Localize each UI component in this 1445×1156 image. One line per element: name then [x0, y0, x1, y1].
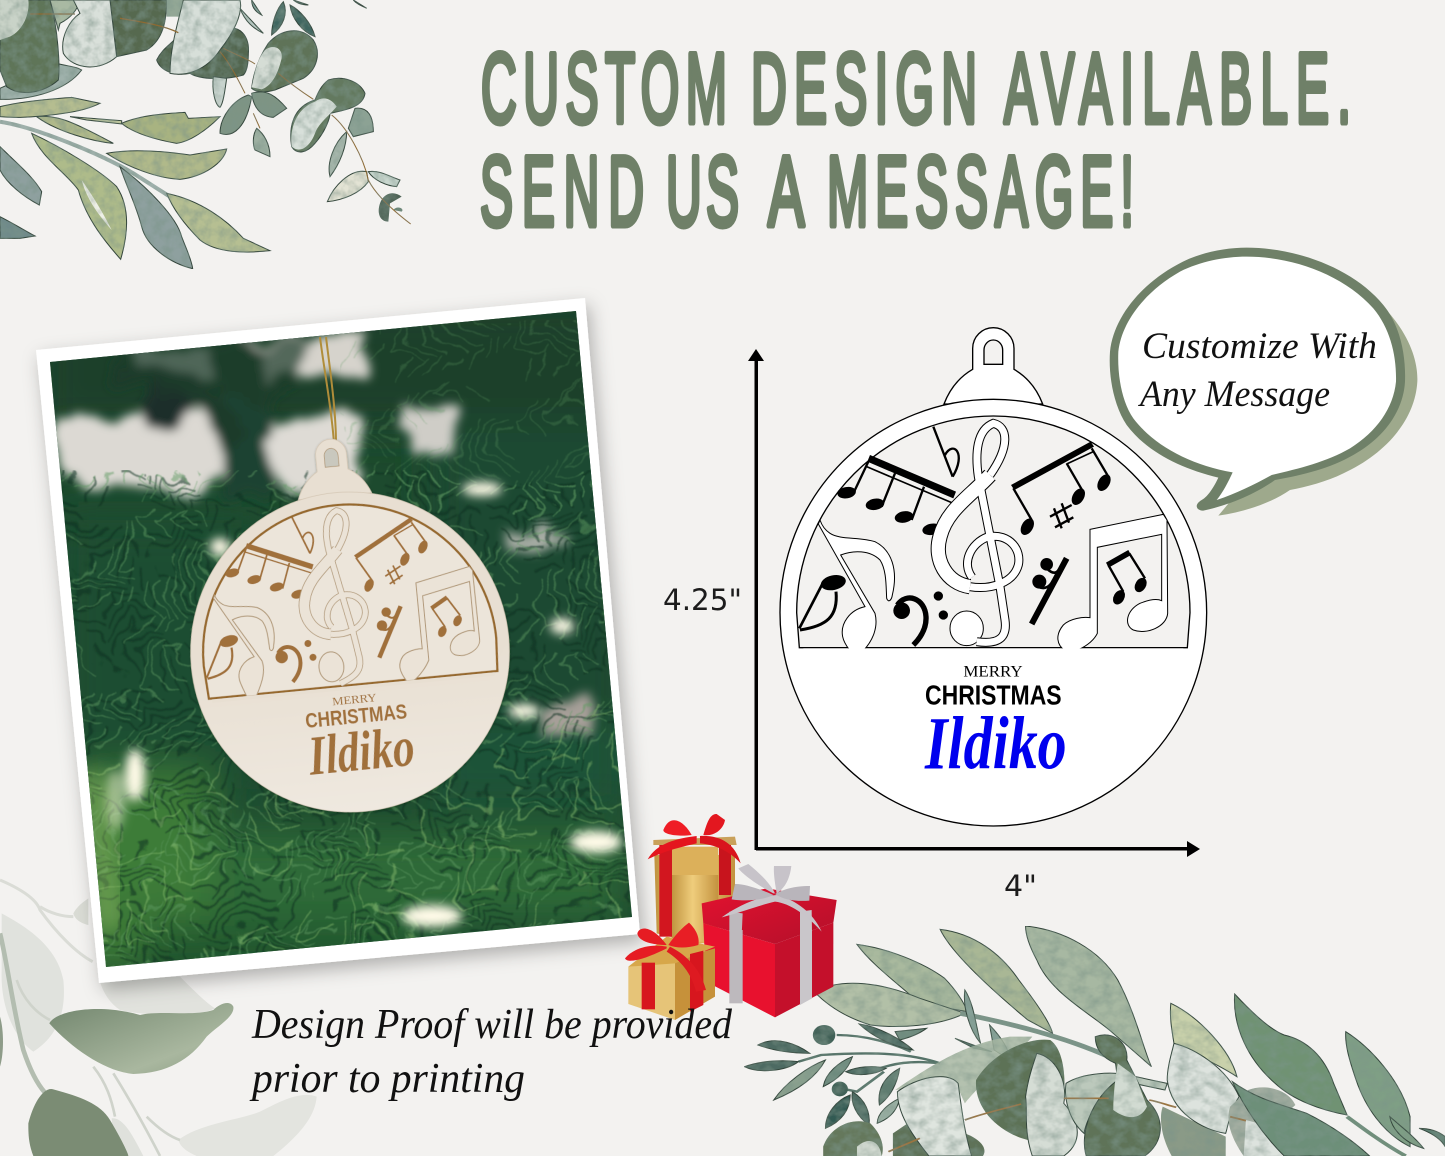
icon: gift boxes — [625, 814, 837, 1020]
photo panel: ornament on Christmas tree — [0, 290, 680, 1000]
wooden ornament — [171, 424, 524, 827]
leaves: bottom right eucalyptus garland — [744, 926, 1445, 1156]
proof note text — [249, 1002, 733, 1102]
leaves: top left eucalyptus — [0, 0, 411, 269]
hanging string — [320, 337, 336, 444]
wooden ornament: MERRY — [332, 692, 377, 709]
tree photograph — [50, 311, 632, 967]
wooden ornament: Ildiko — [305, 716, 417, 788]
size diagram: ornament template: Ildiko — [924, 702, 1067, 785]
arrow: height dimension — [748, 349, 764, 850]
title: DESIGN — [751, 33, 977, 144]
proof note text: prior to printing — [249, 1056, 525, 1102]
bubble interior — [1118, 257, 1396, 500]
size diagram: ornament template: MERRY — [963, 664, 1023, 681]
title: A — [768, 136, 805, 247]
red gift with silver ribbon — [702, 864, 837, 1017]
height label: 4.25" — [663, 583, 742, 617]
small gold gift — [625, 923, 715, 1020]
bubble text: Any Message — [1137, 374, 1330, 415]
leaves: bottom left pale sprig — [0, 880, 317, 1156]
speech bubble callout — [1110, 248, 1417, 516]
title — [480, 33, 1351, 247]
size diagram: ornament template — [780, 328, 1207, 826]
wooden ornament: CHRISTMAS — [304, 701, 408, 733]
tall gold gift — [648, 814, 741, 943]
size diagram: ornament template: CHRISTMAS — [925, 679, 1062, 710]
title: AVAILABLE. — [1004, 33, 1351, 144]
bubble text: Customize With — [1142, 326, 1377, 367]
width label: 4" — [1004, 869, 1037, 903]
bubble outline — [1110, 248, 1405, 511]
proof note text: Design Proof will be provided — [251, 1002, 733, 1048]
arrow: width dimension — [756, 841, 1200, 857]
title: SEND — [480, 136, 644, 247]
photo frame — [36, 298, 640, 983]
title: US — [666, 136, 739, 247]
bubble shadow — [1218, 300, 1417, 516]
title: CUSTOM — [481, 33, 727, 144]
bubble text — [1137, 326, 1377, 415]
title: MESSAGE! — [827, 136, 1134, 247]
